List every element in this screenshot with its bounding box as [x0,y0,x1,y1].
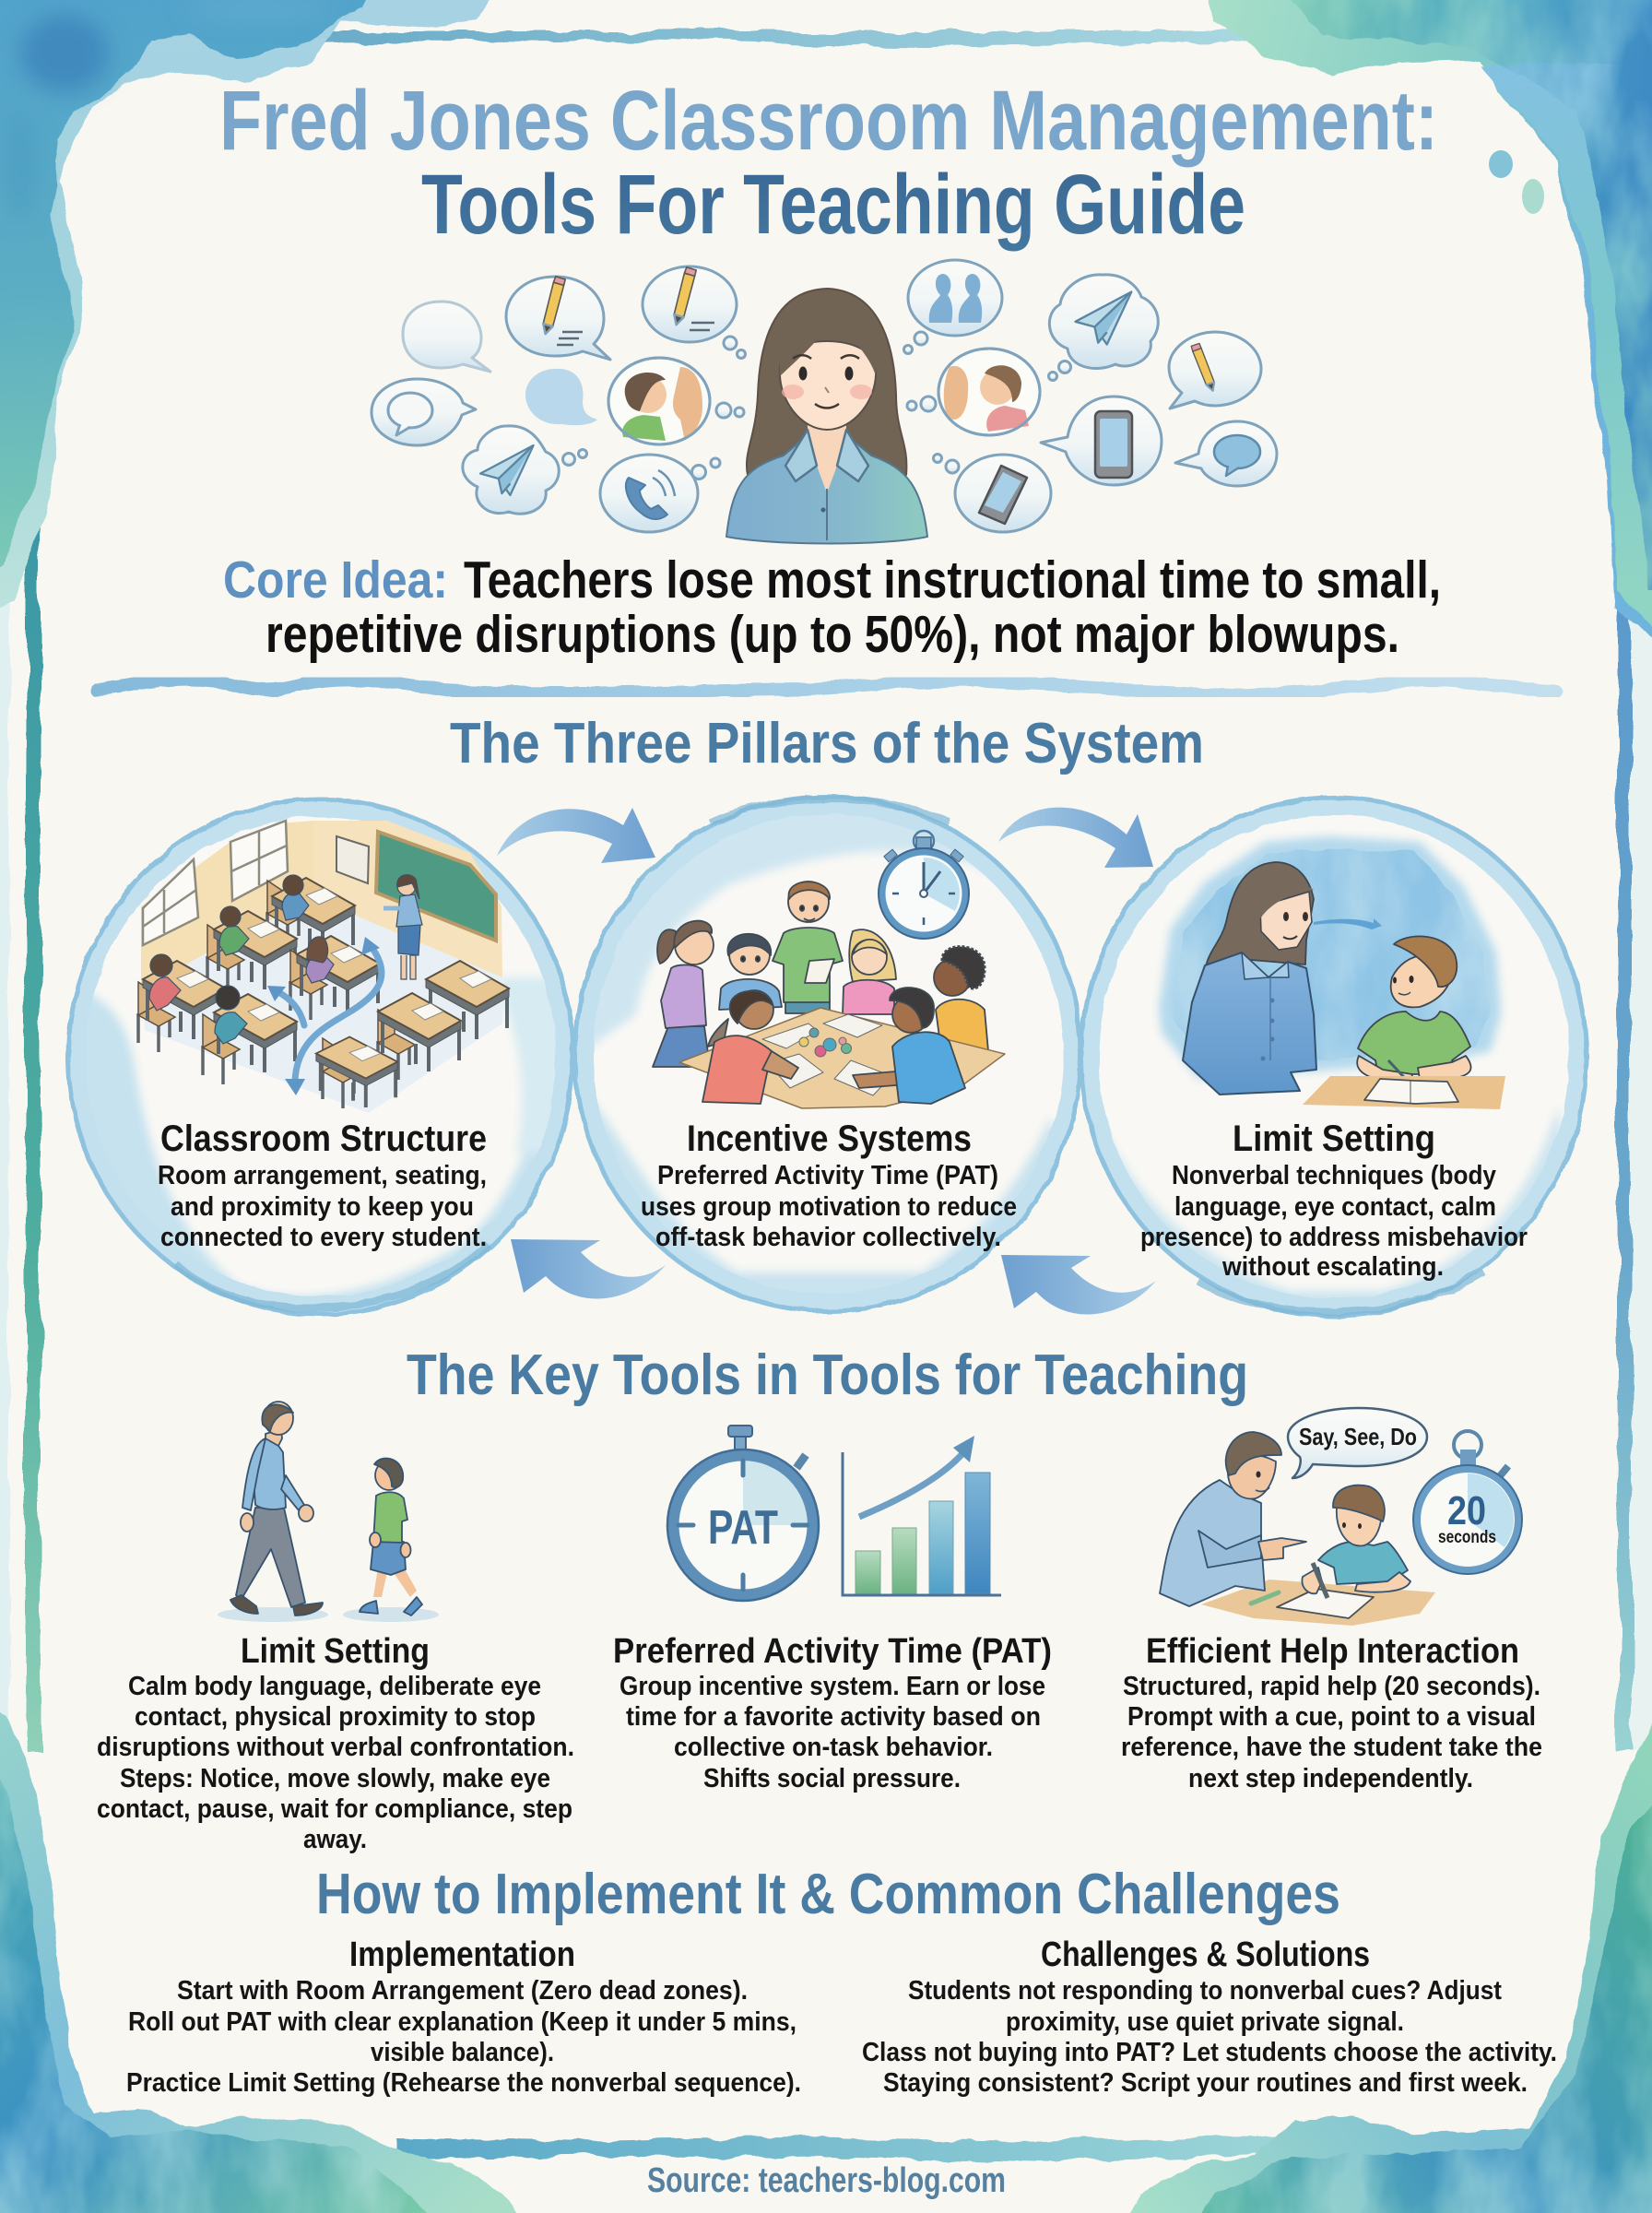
windows [143,821,288,945]
tool 2 text [620,1672,1045,1793]
pillar 1: classroom structure [55,799,590,1328]
tool 1 heading: Limit Setting [241,1632,430,1671]
tool 3: efficient help interaction [1121,1408,1542,1793]
pencil bubble right [1169,332,1261,408]
implementation heading: Implementation [349,1935,575,1974]
phone call bubble [600,455,720,532]
floor shadows [218,1607,328,1622]
pillar 3 text [1140,1161,1528,1282]
whisper bubble left [608,358,710,444]
speech bubble [1288,1408,1427,1478]
pencil thought bubble [643,266,745,358]
pillar 3 text: presence) to address misbehavior [1140,1223,1528,1252]
student desk and book [1303,1076,1505,1109]
PAT stopwatch [667,1426,819,1601]
tool 2: preferred activity time [613,1426,1052,1793]
teacher [230,1402,323,1615]
pillar 1 heading: Classroom Structure [160,1118,487,1159]
blue wash backdrop [1159,836,1501,1079]
20 second stopwatch: seconds [1438,1528,1496,1547]
panel: challenges and solutions [862,1935,1557,2098]
face [780,341,876,430]
tool 1 text: Steps: Notice, move slowly, make eye [120,1764,550,1793]
helper and student illustration [1160,1408,1522,1626]
bubbles left of the teacher [372,266,745,532]
core idea statement [223,550,1441,664]
pillar 2 text: uses group motivation to reduce [641,1192,1017,1222]
shirt [726,433,927,544]
table items [762,1014,891,1095]
pillar 1 text: Room arrangement, seating, [158,1161,487,1190]
challenges text: Students not responding to nonverbal cues? Adjust [908,1976,1502,2006]
implementation text: Practice Limit Setting (Rehearse the nonverbal sequence). [126,2068,801,2098]
20 second stopwatch: 20 [1447,1488,1486,1533]
challenges heading: Challenges & Solutions [1041,1935,1370,1974]
teacher face [1260,892,1312,950]
wash: top right corner [1198,0,1652,664]
bar chart [843,1436,1001,1595]
tool 1 text: Calm body language, deliberate eye [128,1672,541,1701]
teacher eye and smile [1283,913,1307,939]
arrow: incentives to limit setting [998,808,1153,868]
tool 2 text: collective on-task behavior. [674,1733,993,1762]
neck [808,415,846,493]
paper plane cloud right [1049,275,1158,380]
teacher hair back [1206,862,1314,966]
hair back [747,289,906,475]
tablet bubble [933,454,1051,532]
teacher figure [726,289,927,544]
student [1357,936,1471,1086]
standing green boy [773,882,843,1013]
pillar 3 text: language, eye contact, calm [1174,1192,1496,1222]
tool 3 text: reference, have the student take the [1121,1733,1542,1762]
chat icon bubble [372,379,476,445]
seating chart [336,836,369,883]
implementation text: Roll out PAT with clear explanation (Keep it under 5 mins, [128,2007,796,2037]
ruler on desk [1251,1592,1279,1604]
challenges text: proximity, use quiet private signal. [1006,2007,1404,2037]
title line 2: Tools For Teaching Guide [421,158,1245,252]
pencil speech bubble [506,277,610,360]
tool 3 text [1121,1672,1542,1793]
tool 3 text: Structured, rapid help (20 seconds). [1123,1672,1540,1701]
pillar 2 heading: Incentive Systems [687,1118,972,1159]
collar [785,430,868,481]
student [1302,1485,1410,1598]
tool 2 text: Shifts social pressure. [703,1764,961,1793]
pillar 3: limit setting [1079,798,1595,1328]
walking teacher and student illustration [218,1402,439,1622]
hero illustration: teacher surrounded by distractions [372,260,1277,544]
arrow: incentives back to structure [511,1239,666,1298]
dark hair boy [719,934,782,1010]
floor [141,882,504,1113]
20 second stopwatch [1413,1431,1522,1574]
wash: bottom left corner [0,1669,544,2213]
circle background [55,799,590,1328]
tool 2 text: Group incentive system. Earn or lose [620,1672,1045,1701]
blond girl [843,929,896,1014]
worksheet [1277,1589,1374,1618]
ponytail girl [653,921,714,1067]
tool 3 text: next step independently. [1188,1764,1473,1793]
desk [1201,1580,1435,1626]
students around table [653,882,1005,1108]
wash: droplets near title [1489,150,1544,214]
panel: key tools [97,1402,1542,1854]
left wall [141,821,313,984]
challenges text: Staying consistent? Script your routines and first week. [883,2068,1528,2098]
source line: Source: teachers-blog.com [647,2161,1006,2200]
phone bubble [1041,396,1162,485]
tool 3 heading: Efficient Help Interaction [1146,1632,1519,1671]
empty speech bubble [403,302,490,372]
whisper bubble right [907,349,1040,435]
walking path arrows [275,950,382,1081]
paper plane cloud left [463,426,586,514]
student [360,1459,422,1615]
circle background [1079,798,1595,1328]
chalkboard [376,832,496,941]
people bubble [903,260,1002,354]
pale blue cloud [525,369,597,425]
title [219,74,1438,252]
tool 1: limit setting [97,1402,574,1854]
challenges text [862,1976,1557,2098]
pillar 3 text: without escalating. [1221,1252,1444,1282]
hair fringe [780,293,877,376]
panel: implementation [126,1935,801,2098]
front right child [853,988,965,1104]
pillar 1 text: connected to every student. [160,1223,487,1252]
right wall [313,821,502,977]
wash: top left corner [0,0,509,627]
pillar 2 text [641,1161,1017,1252]
heading: implementation: How to Implement It & Common Challenges [316,1863,1340,1926]
core idea label: Core Idea: [223,550,448,609]
wash: bottom right corner [1111,1715,1652,2213]
helper [1160,1432,1306,1606]
table [679,1008,1005,1108]
PAT stopwatch: PAT [708,1501,778,1555]
speech bubble: Say, See, Do [1299,1423,1417,1450]
panel: three pillars cycle [55,793,1595,1328]
curly hair child [934,947,988,1051]
pillar 3 text: Nonverbal techniques (body [1172,1161,1496,1190]
circle background [572,793,1088,1319]
core idea line 2: repetitive disruptions (up to 50%), not major blowups. [266,605,1399,664]
tool 1 text: away. [303,1825,367,1854]
teacher body [1183,953,1316,1095]
chat bubble right [1175,421,1277,486]
face details [782,355,872,408]
teacher collar and buttons [1242,953,1289,1060]
heading: three pillars: The Three Pillars of the System [450,712,1204,775]
implementation text [126,1976,801,2098]
arrow: structure to incentives [497,808,655,863]
pillar 1 text [158,1161,487,1252]
pillar 3 heading: Limit Setting [1233,1118,1435,1159]
desks and chairs [138,878,509,1108]
classroom illustration [138,821,509,1113]
gaze arrow [1314,918,1382,929]
implementation text: Start with Room Arrangement (Zero dead zones). [177,1976,748,2006]
thought dots [716,403,731,418]
seated students [149,875,334,1044]
pillar 1 text: and proximity to keep you [171,1192,474,1222]
tool 1 text: contact, physical proximity to stop [135,1702,536,1732]
stopwatch illustration [879,831,969,939]
challenges text: Class not buying into PAT? Let students choose the activity. [862,2038,1557,2067]
heading: key tools: The Key Tools in Tools for Teaching [407,1343,1248,1407]
pillar 2 text: off-task behavior collectively. [655,1223,1001,1252]
tool 2 heading: Preferred Activity Time (PAT) [613,1632,1052,1671]
pillar 2: incentive systems [572,793,1088,1319]
bubbles right of the teacher [903,260,1277,532]
front left child [702,990,798,1104]
core idea line 1: Teachers lose most instructional time to small, [464,550,1441,609]
implementation text: visible balance). [371,2038,554,2067]
tool 1 text: contact, pause, wait for compliance, step [97,1794,572,1824]
teacher and student illustration [1159,836,1505,1109]
tool 1 text [97,1672,574,1854]
arrow: limit setting back to incentives [1001,1255,1156,1314]
tool 3 text: Prompt with a cue, point to a visual [1127,1702,1536,1732]
tool 2 text: time for a favorite activity based on [626,1702,1041,1732]
teacher in classroom [384,875,422,979]
tool 1 text: disruptions without verbal confrontation. [97,1733,574,1762]
pillar 2 text: Preferred Activity Time (PAT) [657,1161,998,1190]
